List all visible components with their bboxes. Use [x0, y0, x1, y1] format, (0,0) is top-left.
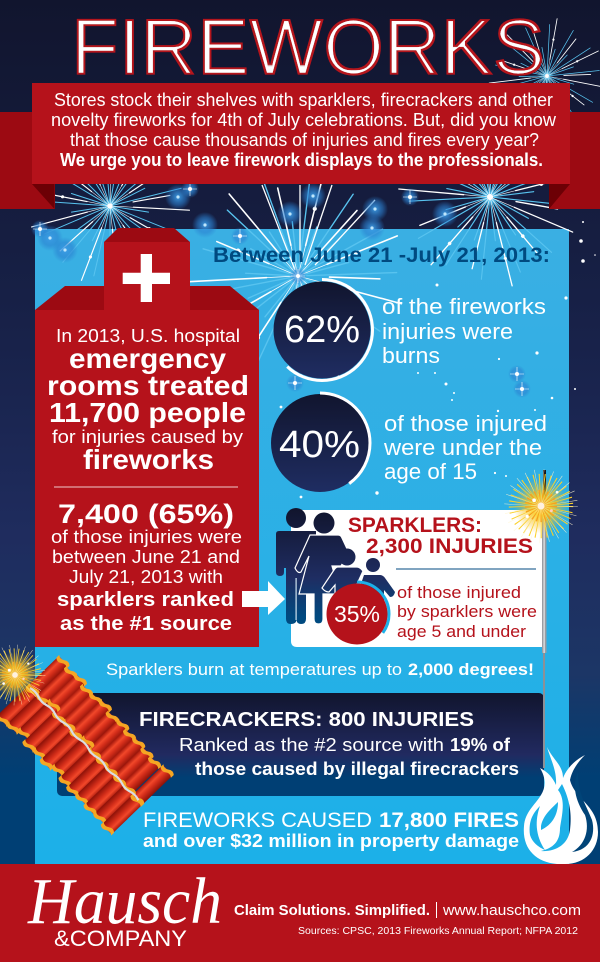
- intro banner: that those cause thousands of injuries and fires every year?: [70, 130, 539, 150]
- stat: 40% under 15: were under the: [383, 435, 542, 460]
- sparklers ranking text: 7,400 (65%): [58, 499, 234, 529]
- sources: Sources: CPSC, 2013 Fireworks Annual Report; NFPA 2012: [298, 926, 578, 937]
- tagline and website: Claim Solutions. Simplified.: [234, 902, 430, 919]
- stat: 40% under 15: age of 15: [384, 459, 477, 484]
- stat: 62% burns: injuries were: [382, 319, 513, 344]
- tagline and website: [234, 902, 581, 919]
- sparkler flare: [513, 478, 569, 534]
- light blue content panel: [35, 229, 569, 864]
- stat: 40% under 15: of those injured: [384, 411, 547, 436]
- firework burst: centre: [190, 184, 402, 376]
- sparkler temperature note: 2,000 degrees!: [408, 660, 534, 679]
- firework burst: left: [31, 184, 190, 281]
- panel: firecrackers: those caused by illegal firecrackers: [195, 759, 519, 779]
- firecracker fuse flare: [0, 652, 38, 698]
- icon: family silhouette: [276, 508, 395, 624]
- sparkler temperature note: Sparklers burn at temperatures up to: [106, 660, 402, 679]
- panel: firecrackers: Ranked as the #2 source with: [179, 735, 444, 755]
- panel: sparklers card: age 5 and under: [397, 622, 526, 641]
- intro banner: [32, 83, 570, 184]
- fires caused text: FIREWORKS CAUSED: [143, 809, 372, 832]
- icon: medical cross: [123, 254, 170, 302]
- hospital building shape: [35, 228, 259, 647]
- icon: firecrackers: [0, 654, 176, 836]
- panel: firecrackers: FIRECRACKERS: 800 INJURIES: [139, 709, 474, 731]
- panel: firecrackers: 19% of: [450, 735, 511, 755]
- stat: 35% circle: 35%: [334, 601, 380, 627]
- ribbon tails behind intro: [0, 112, 600, 209]
- sparklers ranking text: [51, 499, 242, 635]
- sparkler stick: [542, 470, 546, 768]
- sparklers ranking text: July 21, 2013 with: [69, 567, 223, 587]
- title: FIREWORKS: [71, 2, 545, 91]
- firework burst: top right: [484, 11, 600, 137]
- sparkler temperature note: [106, 660, 534, 679]
- panel: sparklers card: [291, 510, 543, 647]
- fires caused text: [143, 809, 519, 851]
- stat: 62% burns: [272, 280, 546, 380]
- panel: firecrackers: [57, 693, 544, 796]
- stat: 35% circle: [325, 582, 389, 646]
- footer bar: [0, 864, 600, 962]
- panel: sparklers card: of those injured: [397, 583, 521, 602]
- stat: 40% under 15: 40%: [279, 424, 360, 466]
- stat: 62% burns: of the fireworks: [382, 294, 546, 319]
- icon: arrow to sparklers: [242, 581, 285, 615]
- panel: hospital emergency rooms: [35, 228, 259, 647]
- icon: flame: [524, 747, 598, 864]
- emergency room text: fireworks: [83, 444, 214, 475]
- scattered stars: [31, 180, 596, 498]
- intro banner: novelty fireworks for 4th of July celebrations. But, did you know: [51, 110, 557, 130]
- panel: sparklers card: 2,300 INJURIES: [366, 535, 533, 558]
- sparklers ranking text: of those injuries were: [51, 527, 242, 547]
- fires caused text: and over $32 million in property damage: [143, 830, 519, 851]
- stat: 62% burns: burns: [382, 343, 440, 368]
- tagline and website: www.hauschco.com: [442, 902, 581, 919]
- sparklers ranking text: sparklers ranked: [57, 589, 234, 611]
- emergency room text: rooms treated: [47, 370, 249, 401]
- sparklers ranking text: as the #1 source: [60, 613, 232, 635]
- emergency room text: In 2013, U.S. hospital: [56, 326, 240, 346]
- sparklers ranking text: between June 21 and: [52, 547, 240, 567]
- fires caused text: 17,800 FIRES: [379, 809, 519, 832]
- emergency room text: 11,700 people: [49, 397, 246, 428]
- emergency room text: for injuries caused by: [52, 427, 243, 447]
- logo: Hausch & Company: Hausch: [27, 865, 222, 938]
- date heading: Between June 21 -July 21, 2013:: [213, 244, 550, 267]
- intro banner: Stores stock their shelves with sparklers, firecrackers and other: [54, 90, 553, 110]
- intro banner: We urge you to leave firework displays to the professionals.: [60, 150, 543, 170]
- panel: sparklers card: by sparklers were: [397, 602, 537, 621]
- fireworks over panel: [31, 184, 574, 376]
- stat: 62% burns: 62%: [284, 309, 360, 351]
- emergency room text: [47, 326, 249, 475]
- logo: Hausch & Company: &COMPANY: [54, 926, 187, 951]
- emergency room text: emergency: [69, 343, 226, 374]
- panel: sparklers card: SPARKLERS:: [348, 514, 482, 537]
- firework burst: upper right: [398, 184, 574, 286]
- stat: 40% under 15: [270, 393, 547, 493]
